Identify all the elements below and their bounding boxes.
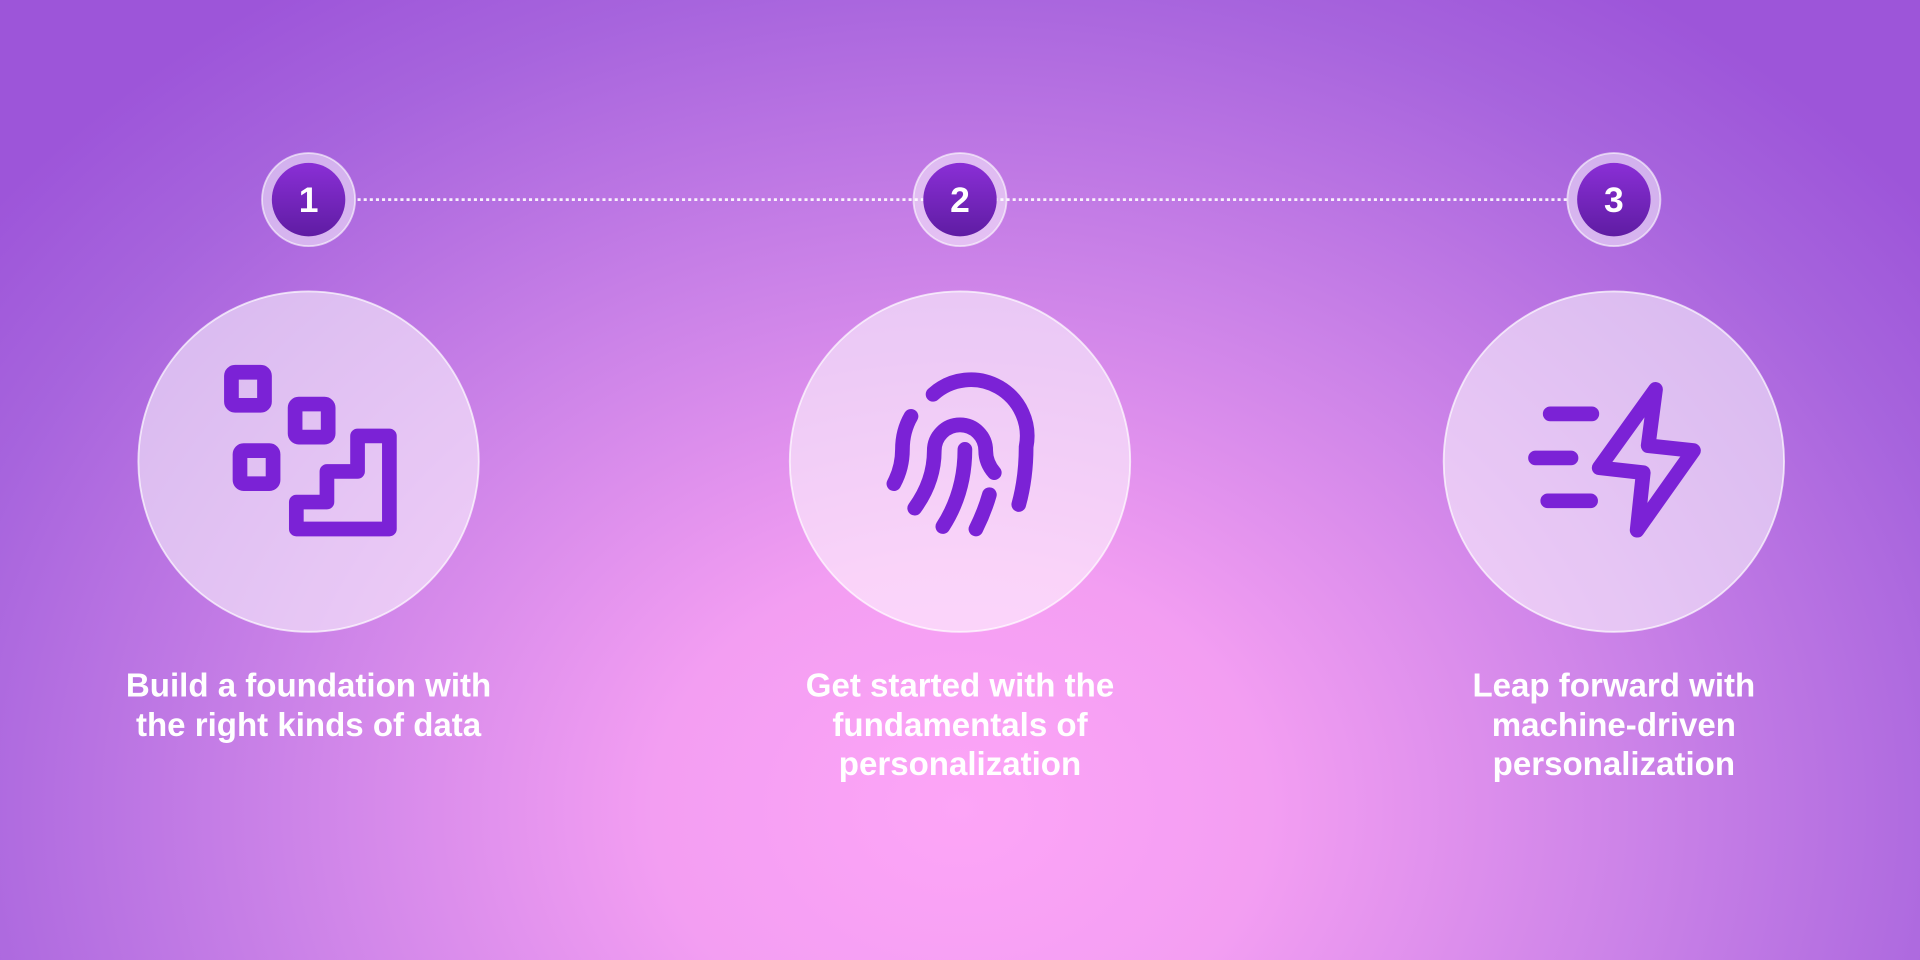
icon circle 1: data blocks and stairs xyxy=(138,291,479,632)
icon circle 3: speed lightning xyxy=(1444,291,1784,632)
step 1 number badge xyxy=(262,153,355,246)
caption 2: fundamentals of xyxy=(832,707,1089,744)
caption 3: Leap forward with xyxy=(1472,668,1755,705)
caption 3: personalization xyxy=(1493,746,1735,783)
caption 3: machine-driven xyxy=(1492,707,1736,744)
caption 2: personalization xyxy=(839,746,1081,783)
step 3 number badge: 3 xyxy=(1604,180,1624,220)
icon circle 2: fingerprint xyxy=(790,291,1130,632)
step 2 number badge xyxy=(913,153,1007,246)
timeline connector dotted line xyxy=(358,198,1567,201)
caption 2: Get started with the xyxy=(806,668,1114,705)
step 3 number badge xyxy=(1567,153,1660,246)
step 1 number badge: 1 xyxy=(299,180,318,220)
caption 1: Build a foundation with xyxy=(126,668,491,705)
step 2 number badge: 2 xyxy=(950,180,970,220)
caption 1: the right kinds of data xyxy=(136,707,482,744)
